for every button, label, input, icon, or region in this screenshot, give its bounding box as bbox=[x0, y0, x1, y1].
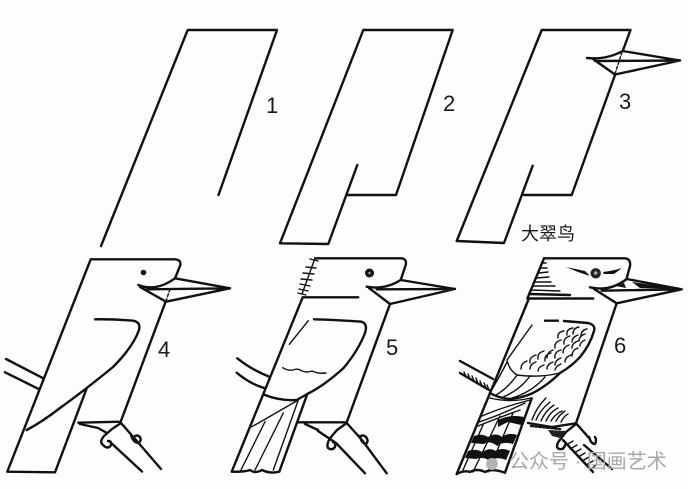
eye, step 5 bbox=[365, 268, 374, 278]
rear branch, step 4 bbox=[5, 359, 43, 389]
number 6: 6 bbox=[614, 333, 626, 358]
step 4 bird bbox=[5, 259, 230, 472]
rear branch, step 6 bbox=[460, 361, 493, 390]
rear branch, step 5 bbox=[237, 358, 269, 388]
belly hatching, step 6 bbox=[532, 398, 568, 422]
step 1 drawing bbox=[101, 30, 278, 246]
number 4: 4 bbox=[158, 337, 170, 362]
crest, step 6 bbox=[528, 258, 570, 297]
number 5: 5 bbox=[386, 335, 398, 360]
wing, step 6 bbox=[490, 321, 594, 399]
beak, step 4 bbox=[138, 278, 230, 302]
watermark: 公众号 · 国画艺术 bbox=[509, 450, 667, 473]
crest, step 5 bbox=[298, 258, 318, 295]
tail feathers, step 5 bbox=[241, 400, 298, 470]
caption: 大翠鸟 bbox=[521, 224, 575, 244]
foot and branch, step 4 bbox=[80, 423, 161, 472]
step 6 bird bbox=[457, 258, 682, 474]
beak, step 6 bbox=[590, 279, 682, 303]
wing, step 5 bbox=[265, 319, 366, 400]
number 1: 1 bbox=[266, 93, 278, 118]
number 3: 3 bbox=[619, 89, 631, 114]
beak, step 5 bbox=[367, 280, 455, 304]
foot and branch, step 6 bbox=[528, 423, 612, 472]
flight feathers, step 6 bbox=[490, 362, 545, 398]
number 2: 2 bbox=[443, 91, 455, 116]
eye, step 4 bbox=[141, 270, 146, 275]
foot and branch, step 5 bbox=[305, 423, 387, 473]
wing scallops, step 6 bbox=[521, 327, 587, 371]
wing, step 4 bbox=[27, 319, 139, 430]
beak, step 3 bbox=[587, 51, 680, 74]
brow and eye, step 6 bbox=[566, 267, 622, 278]
tail, step 6 bbox=[463, 398, 531, 472]
step 5 bird bbox=[232, 258, 455, 473]
step 3 drawing bbox=[457, 30, 680, 243]
step 2 drawing bbox=[280, 30, 455, 244]
